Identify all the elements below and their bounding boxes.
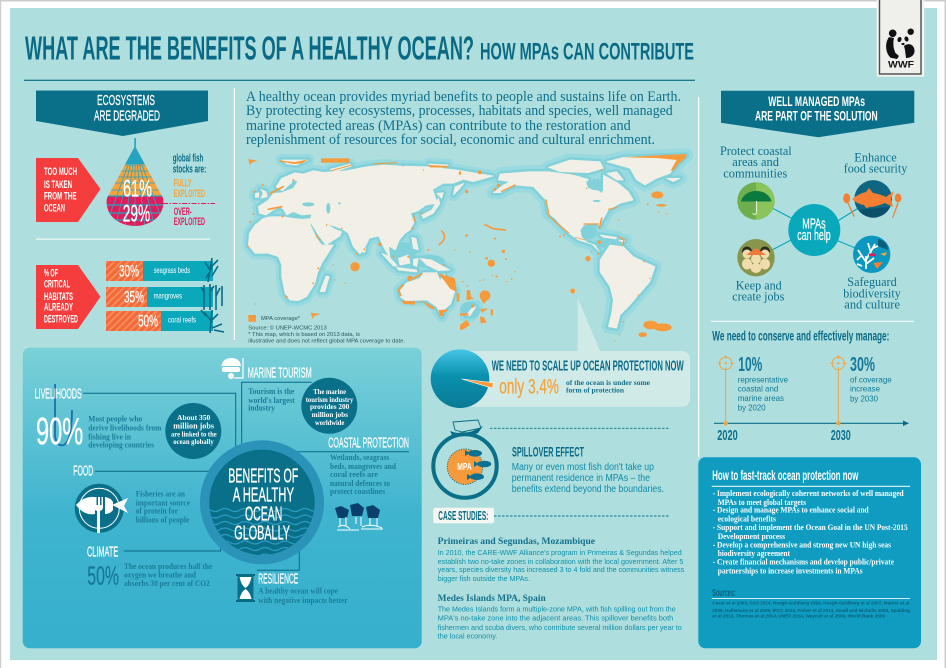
section: climate bbox=[87, 545, 213, 590]
callout: scale up ocean protection: of the ocean is under some bbox=[566, 378, 651, 387]
arrow: percent of critical habitats destroyed: ALREADY bbox=[44, 302, 73, 314]
case study: Medes Islands: The Medes Islands form a multiple-zone MPA, with fish spilling out from the bbox=[438, 605, 676, 614]
banner: ecosystems are degraded: ARE DEGRADED bbox=[94, 109, 160, 125]
case study: Primeiras and Segundas: years, species diversity has increased 3 to 4 fold and the communities witness bbox=[438, 565, 685, 574]
panel: ecosystems are degraded bbox=[36, 90, 224, 333]
section: coastal protection: beds, mangroves and bbox=[330, 462, 396, 471]
section: food: Fisheries are an bbox=[136, 490, 185, 499]
icon: fishing net chart: 29% bbox=[123, 201, 150, 228]
benefit: safeguard biodiversity: and culture bbox=[844, 297, 900, 311]
callout: scale up ocean protection bbox=[431, 298, 690, 408]
benefit: enhance food security: Enhance bbox=[854, 151, 897, 165]
timeline: conserve and manage targets bbox=[712, 329, 909, 444]
section: climate: 50% bbox=[87, 560, 119, 590]
section: coastal protection bbox=[328, 436, 409, 530]
case study: Primeiras and Segundas: In 2010, the CARE-WWF Alliance's program in Primeiras & Segundas helped bbox=[438, 548, 682, 557]
section: marine tourism: provides 200 bbox=[310, 403, 350, 411]
text: intro paragraph: replenishment of resources for social, economic and cultural enrichment. bbox=[246, 132, 655, 148]
section: resilience: with negative impacts better bbox=[258, 596, 348, 605]
text: global fish stocks: OVER- bbox=[174, 206, 192, 218]
target: 10 percent by 2020: 10% bbox=[738, 354, 762, 376]
section: marine tourism: The marine bbox=[313, 388, 346, 396]
section: coastal protection: protect coastlines bbox=[330, 487, 385, 496]
pie chart: 3.4% of ocean bbox=[431, 349, 493, 408]
section: livelihoods: developing countries bbox=[88, 441, 154, 450]
section: food: important source bbox=[136, 499, 190, 508]
icon: fishing net chart: 61% bbox=[123, 176, 152, 203]
icon: MPA with fish bbox=[433, 434, 497, 498]
list: actions: partnerships to increase investments in MPAs bbox=[718, 566, 863, 575]
section: spillover effect bbox=[433, 420, 670, 498]
panel: how to fast-track ocean protection bbox=[698, 457, 921, 648]
arrow: percent of critical habitats destroyed bbox=[36, 265, 100, 329]
case study: Medes Islands bbox=[438, 594, 682, 641]
bar chart: habitats destroyed: 50% bbox=[138, 313, 158, 331]
section: marine tourism: MARINE TOURISM bbox=[248, 366, 312, 382]
banner: part of the solution bbox=[721, 91, 914, 137]
section: livelihoods: About 350 bbox=[177, 413, 211, 422]
legend: MPA coverage: MPA coverage* bbox=[261, 316, 301, 322]
legend: MPA coverage: Source: © UNEP-WCMC 2013 bbox=[248, 324, 327, 331]
target: 10 percent by 2020: by 2020 bbox=[738, 403, 766, 413]
section: coastal protection: Wetlands, seagrass bbox=[330, 453, 389, 462]
arrow: too much is taken: IS TAKEN bbox=[44, 179, 72, 191]
target: 30 percent by 2030: by 2030 bbox=[850, 394, 878, 404]
icon: houses and mangroves bbox=[335, 503, 383, 530]
text: global fish stocks: EXPLOITED bbox=[174, 216, 205, 228]
callout: scale up ocean protection: WE NEED TO SCALE UP OCEAN PROTECTION NOW bbox=[492, 359, 684, 375]
section: food bbox=[73, 464, 190, 533]
list: actions: biodiversity agreement bbox=[718, 549, 790, 558]
benefit: enhance food security: food security bbox=[844, 162, 908, 176]
target: 10 percent by 2020 bbox=[738, 354, 788, 413]
text: global fish stocks: global fish bbox=[173, 153, 203, 165]
callout: scale up ocean protection: form of protection bbox=[566, 386, 625, 395]
case study: Medes Islands: MPA's no-take zone into the adjacent areas. This spillover benefits both bbox=[438, 614, 673, 623]
central circle: benefits globally: BENEFITS OF bbox=[228, 465, 298, 488]
target: 30 percent by 2030: of coverage bbox=[850, 375, 892, 385]
timeline: conserve and manage targets: 2020 bbox=[717, 427, 738, 444]
icon: fish hook bbox=[55, 384, 72, 445]
text: intro paragraph: By protecting key ecosystems, processes, habitats and species, well managed bbox=[246, 103, 673, 119]
text: intro paragraph: A healthy ocean provides myriad benefits to people and sustains life on Earth. bbox=[246, 89, 681, 105]
target: 30 percent by 2030 bbox=[850, 354, 892, 404]
sources: 2009, Hallemans et al 2008, IPCC 2013, Fisher et al 2014, Small and Nicholls 2003, Spalding bbox=[712, 608, 910, 614]
text: global fish stocks: EXPLOITED bbox=[174, 188, 205, 200]
sources bbox=[712, 588, 910, 620]
logo: WWF bbox=[877, 0, 924, 77]
arrow: too much is taken: FROM THE bbox=[44, 190, 76, 202]
section: marine tourism: industry bbox=[248, 404, 275, 413]
bar chart: habitats destroyed: 35% bbox=[124, 289, 144, 307]
list: actions: - Support and implement the Ocean Goal in the UN Post-2015 bbox=[713, 523, 908, 532]
bar chart: habitats destroyed: 30% bbox=[119, 263, 139, 281]
section: resilience: A healthy ocean will cope bbox=[258, 587, 338, 596]
section: coastal protection: natural defences to bbox=[330, 479, 390, 488]
sources: Sources: bbox=[712, 588, 736, 599]
case study: Medes Islands: fishermen and scuba divers, who contribute several million dollars per year to bbox=[438, 623, 682, 632]
section: livelihoods: million jobs bbox=[173, 421, 214, 430]
arrow: percent of critical habitats destroyed: CRITICAL bbox=[44, 279, 70, 291]
section: livelihoods: are linked to the bbox=[171, 431, 217, 439]
section: marine tourism: tourism industry bbox=[306, 396, 354, 404]
section: livelihoods bbox=[35, 384, 221, 459]
section: spillover effect: permanent residence in MPAs – the bbox=[512, 473, 650, 484]
banner: part of the solution: WELL MANAGED MPAs bbox=[768, 93, 865, 109]
panel: well managed MPAs bbox=[711, 91, 914, 322]
case study: Primeiras and Segundas: Primeiras and Segundas, Mozambique bbox=[438, 537, 595, 547]
hub: MPAs can help: MPAs bbox=[802, 216, 826, 232]
target: 10 percent by 2020: coastal and bbox=[738, 384, 779, 394]
section: resilience bbox=[236, 572, 348, 605]
list: actions: Development process bbox=[718, 532, 785, 541]
arrow: percent of critical habitats destroyed: DESTROYED bbox=[44, 314, 78, 326]
map markers: western hemisphere section bbox=[247, 158, 470, 319]
list: actions: - Create financial mechanisms and develop public/private bbox=[713, 558, 894, 567]
banner: ecosystems are degraded: ECOSYSTEMS bbox=[97, 93, 155, 109]
section: food: billions of people bbox=[136, 516, 190, 525]
list: actions: - Develop a comprehensive and strong new UN high seas bbox=[713, 541, 891, 550]
list: actions: - Design and manage MPAs to enhance social and bbox=[713, 506, 869, 515]
section: livelihoods: derive livelihoods from bbox=[88, 424, 162, 433]
section: food: FOOD bbox=[73, 464, 93, 480]
legend: MPA coverage bbox=[248, 315, 405, 345]
icon: hourglass bbox=[236, 574, 255, 602]
section: spillover effect: SPILLOVER EFFECT bbox=[512, 444, 584, 460]
section: climate: CLIMATE bbox=[87, 545, 118, 561]
section: marine tourism: million jobs bbox=[312, 411, 348, 419]
section: climate: oxygen we breathe and bbox=[124, 571, 197, 580]
section: livelihoods: Most people who bbox=[88, 415, 142, 424]
section: marine tourism: worldwide bbox=[315, 419, 344, 427]
panel: benefits of a healthy ocean: COASTAL PROTECTION bbox=[328, 436, 409, 452]
arrow: too much is taken: TOO MUCH bbox=[44, 166, 77, 178]
benefit: safeguard biodiversity bbox=[843, 236, 901, 311]
list: actions: ecological benefits bbox=[718, 515, 776, 524]
icon: fishing net chart bbox=[100, 138, 215, 228]
section: livelihoods: fishing live in bbox=[88, 433, 132, 442]
panel: benefits of a healthy ocean bbox=[23, 348, 422, 648]
case study: Primeiras and Segundas: establish two no-take zones in collaboration with the local government. After 5 bbox=[438, 557, 683, 566]
arrow: too much is taken: OCEAN bbox=[44, 202, 65, 214]
arrow: percent of critical habitats destroyed: % OF bbox=[44, 268, 58, 280]
legend: MPA coverage: illustrative and does not reflect global MPA coverage to date. bbox=[248, 339, 405, 345]
section: coastal protection: coral reefs are bbox=[330, 470, 378, 479]
callout: scale up ocean protection: only 3.4% bbox=[499, 375, 559, 398]
section: marine tourism: Tourism is the bbox=[248, 387, 295, 396]
section: resilience: RESILIENCE bbox=[258, 572, 298, 588]
central circle: benefits globally: OCEAN bbox=[245, 503, 282, 526]
text: global fish stocks: stocks are: bbox=[173, 164, 206, 176]
bar chart: habitats destroyed: seagrass beds bbox=[154, 265, 190, 275]
text: intro paragraph: marine protected areas (MPAs) can contribute to the restoration and bbox=[246, 118, 631, 134]
arrow: too much is taken bbox=[36, 158, 100, 222]
benefit: protect coastal areas bbox=[720, 144, 792, 220]
central circle: benefits globally: A HEALTHY bbox=[233, 484, 294, 507]
benefit: keep and create jobs: create jobs bbox=[732, 290, 784, 304]
icon: MPA with fish: MPA bbox=[457, 462, 472, 473]
bar chart: habitats destroyed bbox=[106, 258, 224, 333]
benefit: enhance food security bbox=[843, 151, 908, 218]
text: intro paragraph bbox=[246, 89, 681, 148]
section: climate: absorbs 30 per cent of CO2 bbox=[124, 579, 210, 588]
section: spillover effect: Many or even most fish don't take up bbox=[512, 462, 654, 473]
benefit: protect coastal areas: communities bbox=[723, 167, 787, 181]
case study: Primeiras and Segundas: bigger fish outside the MPAs. bbox=[438, 574, 530, 583]
section: case studies bbox=[433, 508, 685, 641]
icon: diving mask bbox=[221, 358, 243, 379]
case study: Medes Islands: Medes Islands MPA, Spain bbox=[438, 594, 547, 604]
logo: WWF: WWF bbox=[888, 60, 914, 71]
icon: fish on plate bbox=[75, 484, 128, 533]
text: global fish stocks: FULLY bbox=[174, 178, 192, 190]
list: actions bbox=[713, 489, 908, 575]
benefit: protect coastal areas: areas and bbox=[732, 155, 780, 169]
benefit: safeguard biodiversity: biodiversity bbox=[843, 287, 901, 301]
arrow: percent of critical habitats destroyed: HABITATS bbox=[44, 291, 73, 303]
banner: ecosystems are degraded bbox=[36, 90, 208, 136]
case study: Medes Islands: the local economy. bbox=[438, 632, 497, 641]
sources: Cesar et al 2003, FAO 2014, Hoegh-Guldberg 1999, Hoegh-Guldberg et al 2007, Marino et al bbox=[712, 600, 909, 606]
world map: MPA coverage bbox=[247, 154, 687, 345]
benefit: protect coastal areas: Protect coastal bbox=[720, 144, 792, 158]
benefit: keep and create jobs: Keep and bbox=[736, 278, 782, 292]
section: marine tourism: world's largest bbox=[248, 396, 295, 405]
benefit: keep and create jobs bbox=[732, 239, 784, 304]
bar chart: habitats destroyed: mangroves bbox=[154, 291, 182, 301]
timeline: conserve and manage targets: 2030 bbox=[831, 427, 851, 444]
section: livelihoods: 90% bbox=[36, 411, 83, 453]
section: livelihoods: LIVELIHOODS bbox=[35, 386, 82, 402]
target: 30 percent by 2030: increase bbox=[850, 384, 880, 394]
target: 10 percent by 2020: marine areas bbox=[738, 393, 784, 403]
section: climate: The ocean produces half the bbox=[124, 562, 213, 571]
icon: boat bbox=[450, 420, 483, 436]
target: 30 percent by 2030: 30% bbox=[850, 354, 875, 376]
case study: Primeiras and Segundas bbox=[438, 537, 685, 583]
section: livelihoods: ocean globally bbox=[173, 438, 214, 446]
hub: MPAs can help bbox=[788, 204, 840, 256]
central circle: benefits globally: GLOBALLY bbox=[234, 521, 290, 544]
section: marine tourism bbox=[221, 358, 357, 434]
bar chart: habitats destroyed: coral reefs bbox=[168, 315, 196, 325]
title: HOW MPAs CAN CONTRIBUTE bbox=[480, 38, 694, 65]
hub: MPAs can help: can help bbox=[797, 228, 831, 244]
list: actions: - Implement ecologically coherent networks of well managed bbox=[713, 489, 904, 498]
benefit: safeguard biodiversity: Safeguard bbox=[847, 275, 897, 289]
target: 10 percent by 2020: representative bbox=[738, 375, 788, 385]
list: actions: MPAs to meet global targets bbox=[718, 498, 806, 507]
section: case studies: CASE STUDIES: bbox=[438, 509, 488, 523]
section: spillover effect: benefits extend beyond the boundaries. bbox=[512, 484, 664, 495]
section: food: of protein for bbox=[136, 507, 178, 516]
title: WHAT ARE THE BENEFITS OF A HEALTHY OCEAN? bbox=[25, 30, 474, 67]
sources: et al 2013, Thomas et al 2014, UNEP 2014, Wayculi et al 2009, World Bank 2009 bbox=[712, 614, 885, 620]
text: global fish stocks bbox=[173, 153, 206, 228]
central circle: benefits globally bbox=[200, 440, 324, 564]
legend: MPA coverage: * This map, which is based on 2013 data, is bbox=[248, 332, 360, 338]
